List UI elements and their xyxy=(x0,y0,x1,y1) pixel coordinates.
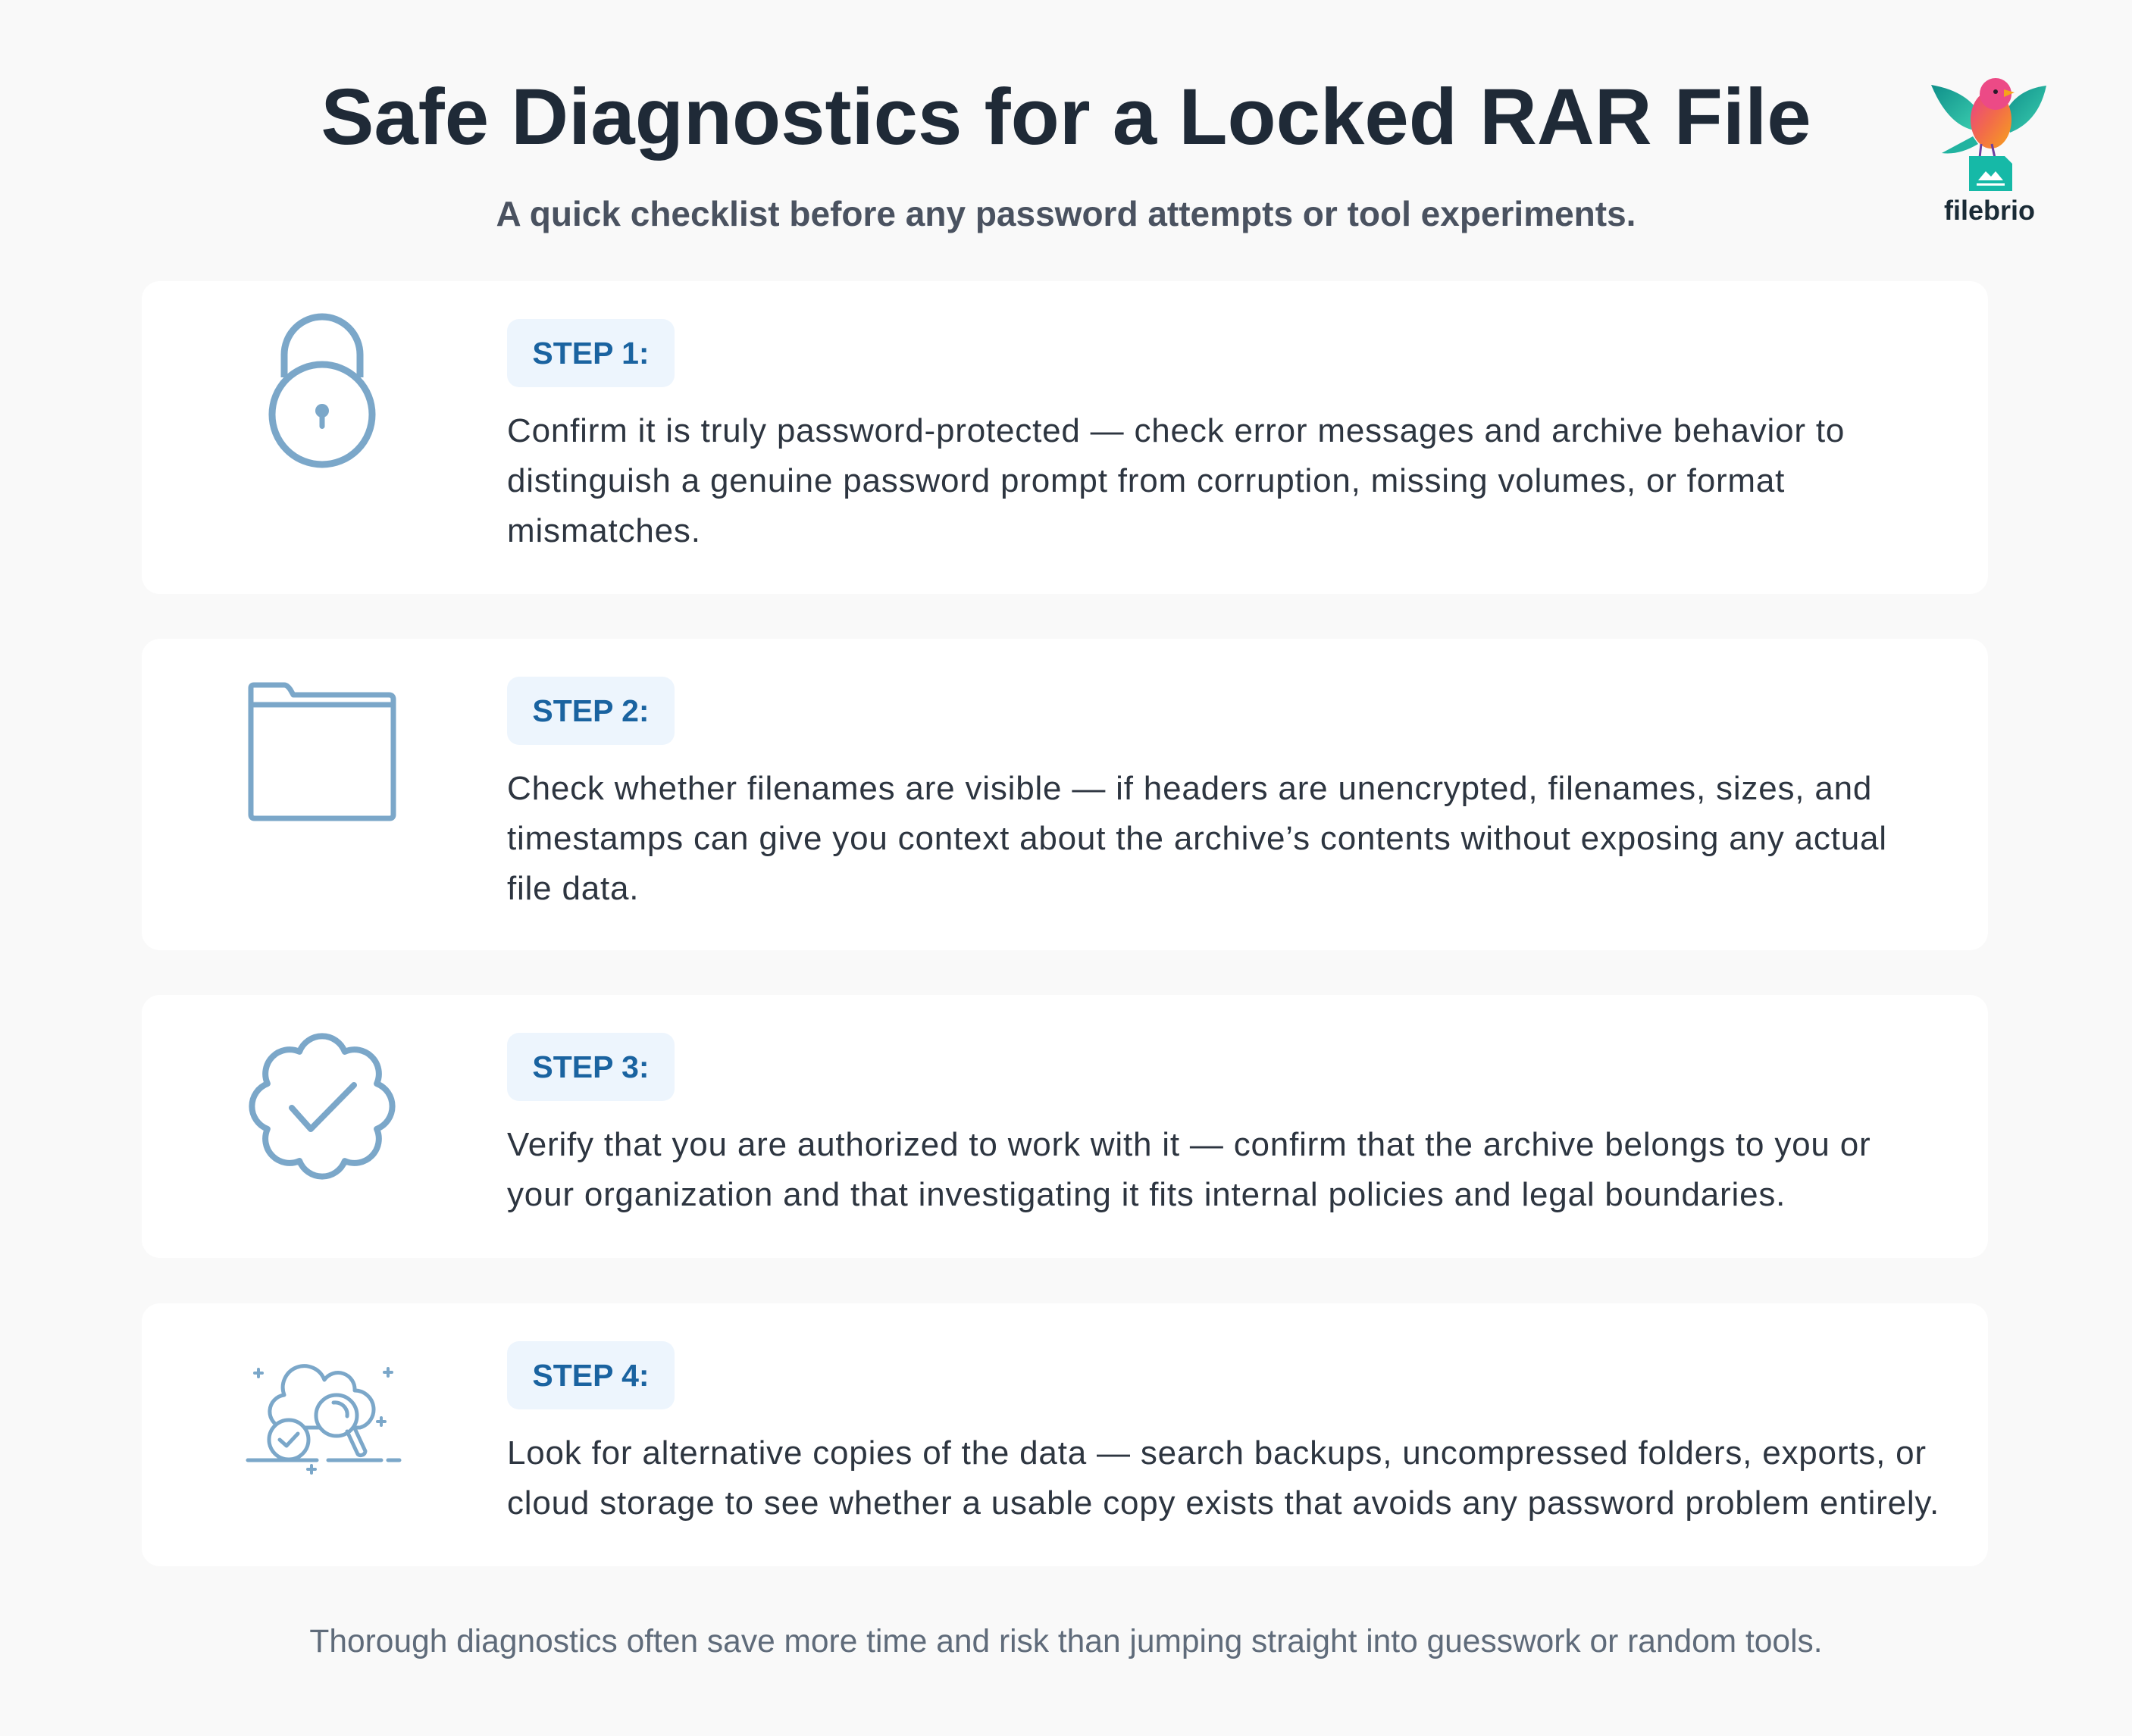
text: step 2: file data. xyxy=(507,870,639,907)
logo: filebrio: filebrio xyxy=(1944,195,2035,226)
subtitle: A quick checklist before any password attempts or tool experiments. xyxy=(496,194,1636,233)
text: step 1: mismatches. xyxy=(507,512,701,549)
icon: cloud search xyxy=(246,1364,402,1475)
icon: folder xyxy=(249,682,396,821)
logo: filebrio xyxy=(1931,78,2046,226)
text: step 1: distinguish a genuine password prompt from corruption, missing volumes, or format xyxy=(507,462,1785,499)
text: step 2 xyxy=(507,770,1887,907)
text: step 1 xyxy=(507,412,1845,549)
text: step 4 xyxy=(507,1434,1939,1522)
text: step 1: Confirm it is truly password-protected — check error messages and archive behavior to xyxy=(507,412,1845,449)
title: Safe Diagnostics for a Locked RAR File xyxy=(321,73,1811,161)
panel: step 1 xyxy=(142,281,1988,594)
panel: step 4 xyxy=(142,1303,1988,1566)
badge: step 4 xyxy=(507,1341,675,1409)
text: step 4: Look for alternative copies of the data — search backups, uncompressed folders, exports, or xyxy=(507,1434,1927,1472)
badge: step 2 xyxy=(507,677,675,745)
badge: step 1 xyxy=(507,319,675,387)
panel: step 3 xyxy=(142,995,1988,1258)
text: step 2: timestamps can give you context about the archive’s contents without exposing any actual xyxy=(507,820,1887,857)
footer note: Thorough diagnostics often save more time and risk than jumping straight into guesswork or random tools. xyxy=(309,1624,1823,1659)
text: step 3 xyxy=(507,1126,1871,1213)
text: step 3: your organization and that investigating it fits internal policies and legal boundaries. xyxy=(507,1176,1786,1213)
icon: verified badge xyxy=(249,1033,396,1180)
text: step 3: Verify that you are authorized to work with it — confirm that the archive belongs to you or xyxy=(507,1126,1871,1163)
text: step 2: Check whether filenames are visible — if headers are unencrypted, filenames, sizes, and xyxy=(507,770,1872,807)
panel: step 2 xyxy=(142,639,1988,950)
badge: step 3 xyxy=(507,1033,675,1101)
badge: step 3: STEP 3: xyxy=(532,1049,650,1084)
text: step 4: cloud storage to see whether a usable copy exists that avoids any password problem entirely. xyxy=(507,1484,1939,1522)
badge: step 4: STEP 4: xyxy=(532,1358,650,1393)
icon: padlock xyxy=(268,314,376,468)
badge: step 1: STEP 1: xyxy=(532,336,650,371)
badge: step 2: STEP 2: xyxy=(532,693,650,728)
